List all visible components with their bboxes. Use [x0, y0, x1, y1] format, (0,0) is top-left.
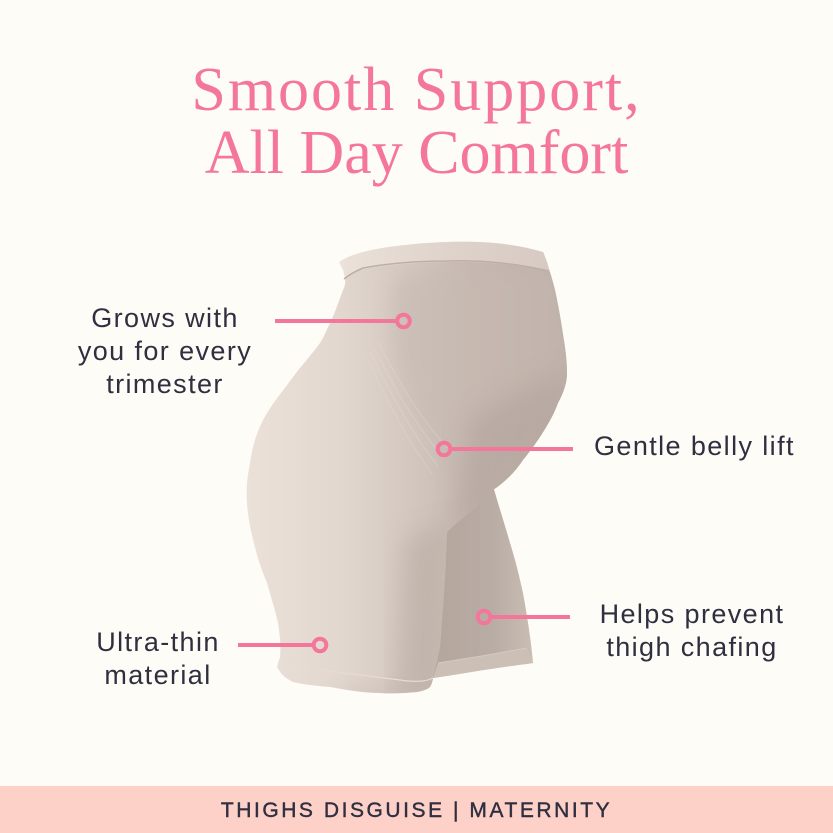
footer band: THIGHS DISGUISE | MATERNITY — [221, 799, 612, 822]
callout text: grows with you: you for every — [78, 336, 252, 366]
back leg — [433, 486, 533, 678]
callout text: gentle belly lift: Gentle belly lift — [594, 431, 795, 461]
waistband — [339, 242, 550, 278]
product illustration: maternity shorts — [246, 242, 567, 694]
callout text: thigh chafing — [600, 599, 784, 662]
callout text: thigh chafing: Helps prevent — [600, 599, 784, 629]
back leg hem — [433, 648, 533, 678]
main body — [247, 250, 567, 693]
callout line: gentle belly lift — [436, 440, 573, 458]
callout line: grows with you — [275, 312, 412, 330]
front hem seam — [280, 658, 433, 681]
callout text: grows with you — [78, 303, 252, 399]
waistband seam — [344, 261, 549, 279]
title: All Day Comfort — [205, 119, 628, 187]
callout text: ultra-thin: Ultra-thin — [96, 627, 220, 657]
callout text: ultra-thin — [96, 627, 220, 690]
callout text: grows with you: trimester — [106, 369, 224, 399]
callout text: thigh chafing: thigh chafing — [606, 632, 778, 662]
callout line: thigh chafing — [476, 608, 570, 626]
callout text: ultra-thin: material — [104, 660, 212, 690]
title: Smooth Support, — [191, 56, 642, 124]
title — [191, 56, 642, 187]
ribbed seam — [367, 340, 450, 474]
footer band — [0, 786, 833, 833]
callout line: ultra-thin — [238, 636, 328, 654]
soft belly shading — [366, 288, 567, 694]
callout text: grows with you: Grows with — [91, 303, 239, 333]
back hem seam — [438, 648, 527, 663]
